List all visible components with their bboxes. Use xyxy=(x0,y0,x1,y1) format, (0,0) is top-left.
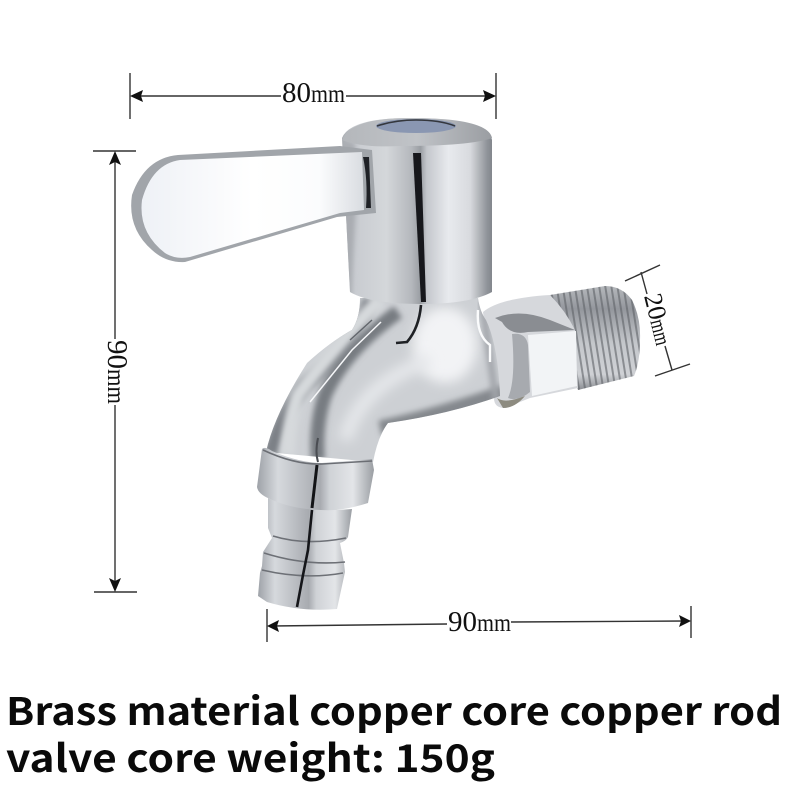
dimension: left 90mm xyxy=(93,151,137,592)
handle cylinder xyxy=(340,116,495,306)
cap button xyxy=(376,119,456,133)
spout reflection lines xyxy=(310,305,490,462)
caption text xyxy=(6,681,782,783)
cylinder top cap xyxy=(342,118,492,146)
dimension: left 90mm: mm xyxy=(102,369,129,404)
dimension: top 80mm: 80 xyxy=(282,77,311,109)
faucet body and spout xyxy=(266,298,500,462)
caption text: valve core weight: 150g xyxy=(6,728,495,783)
faucet ring collar xyxy=(257,448,374,511)
dimension: right 20mm xyxy=(625,265,690,376)
dimension: left 90mm: 90 xyxy=(101,340,133,369)
dimension: bottom 90mm: mm xyxy=(477,610,511,637)
dimension: right 20mm: mm xyxy=(645,316,676,348)
hose nozzle xyxy=(258,498,352,610)
dimension: bottom 90mm: 90 xyxy=(448,606,477,638)
dimension: top 80mm xyxy=(130,73,496,119)
dimension: top 80mm: mm xyxy=(311,81,345,108)
faucet connector: threaded outlet xyxy=(483,286,640,408)
faucet xyxy=(131,116,640,610)
handle dark reflections xyxy=(413,153,426,302)
dimension: right 20mm: 20 xyxy=(638,290,673,323)
caption text: Brass material copper core copper rod xyxy=(6,681,782,736)
lever handle xyxy=(131,146,376,262)
dimension: bottom 90mm xyxy=(267,606,691,642)
